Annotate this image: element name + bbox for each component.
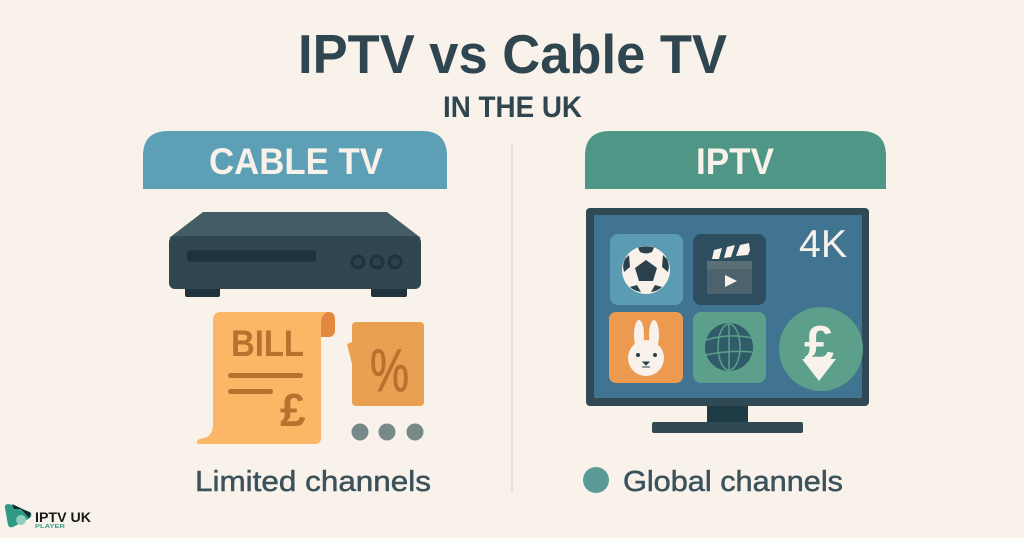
icon: paper bill: £ <box>280 384 306 436</box>
subtitle: IN THE UK <box>443 91 582 124</box>
panel: cable TV header: CABLE TV <box>209 141 383 182</box>
icon: cable set-top box <box>169 212 421 297</box>
panel: cable TV header <box>143 131 447 189</box>
icon: kids rabbit tile <box>609 312 683 383</box>
icon: global channels dot <box>583 467 609 493</box>
icon: globe tile <box>693 312 766 383</box>
icon: film clapper tile <box>693 234 766 305</box>
icon: price-down badge: £ <box>804 316 834 374</box>
icon: television <box>586 208 869 433</box>
logo: PLAYER <box>35 524 65 530</box>
icon: three dots <box>352 424 424 440</box>
title: IPTV vs Cable TV <box>298 23 727 85</box>
icon: price-down badge <box>779 307 863 391</box>
label: global channels: Global channels <box>623 466 843 498</box>
icon: paper bill: BILL <box>231 323 304 364</box>
icon: football tile <box>610 234 683 305</box>
logo: IPTV UK <box>35 510 91 525</box>
logo <box>5 504 91 530</box>
icon: percent tag: % <box>370 337 409 404</box>
panel: IPTV header <box>585 131 886 189</box>
icon: paper bill <box>197 312 335 444</box>
label: limited channels: Limited channels <box>195 466 431 498</box>
icon: percent tag <box>347 322 424 406</box>
panel: IPTV header: IPTV <box>696 141 774 182</box>
label: 4K: 4K <box>799 223 847 266</box>
